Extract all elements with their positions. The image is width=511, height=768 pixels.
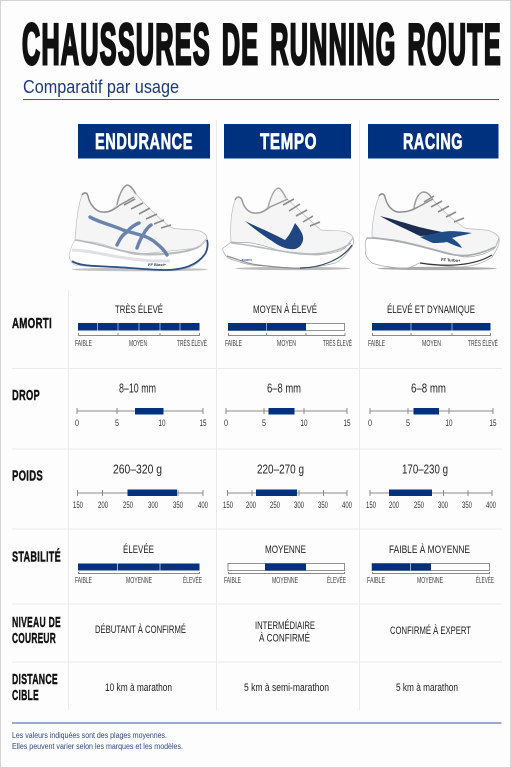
gauge: amorti tempo xyxy=(225,303,352,348)
shoe: endurance xyxy=(69,185,208,271)
header: racing xyxy=(368,124,498,158)
header: tempo xyxy=(224,124,351,158)
row: amorti xyxy=(12,303,498,348)
scale: poids tempo xyxy=(223,462,352,511)
row label: amorti: AMORTI xyxy=(12,316,52,332)
scale: drop racing: 15 xyxy=(490,418,496,429)
scale: poids tempo: 250 xyxy=(270,500,280,511)
header: tempo: TEMPO xyxy=(260,129,317,154)
scale: poids endurance: 250 xyxy=(123,500,133,511)
gauge: amorti endurance xyxy=(75,303,207,348)
scale: drop tempo: 5 xyxy=(262,418,266,429)
scale: drop endurance: 8–10 mm xyxy=(119,382,156,396)
scale: drop tempo: 0 xyxy=(224,418,228,429)
scale: poids racing: 170–230 g xyxy=(402,462,448,476)
gauge: amorti tempo: FAIBLE xyxy=(225,339,242,348)
gauge: amorti racing: ÉLEVÉ ET DYNAMIQUE xyxy=(387,303,475,316)
row label: niveau de coureur: NIVEAU DE xyxy=(12,615,61,631)
header: racing: RACING xyxy=(403,129,463,154)
row label: stabilite: STABILITÉ xyxy=(12,548,61,566)
scale: poids endurance: 150 xyxy=(73,500,83,511)
scale: drop racing: 10 xyxy=(446,418,452,429)
scale: poids tempo: 300 xyxy=(294,500,304,511)
gauge: stabilite racing: FAIBLE À MOYENNE xyxy=(389,543,470,556)
text: niveau tempo: INTERMÉDIAIRE xyxy=(255,619,315,632)
scale: drop racing xyxy=(368,382,496,429)
gauge: stabilite racing: ÉLEVÉE xyxy=(476,576,494,585)
header: endurance: ENDURANCE xyxy=(95,129,193,154)
shoe: racing xyxy=(365,192,499,270)
scale: drop endurance: 5 xyxy=(115,418,119,429)
gauge: stabilite endurance: ÉLEVÉE xyxy=(183,576,202,585)
scale: drop racing: 0 xyxy=(368,418,372,429)
scale: drop endurance: 10 xyxy=(158,418,166,429)
scale: poids tempo: 200 xyxy=(246,500,256,511)
gauge: amorti tempo: MOYEN xyxy=(277,339,296,348)
text: niveau tempo xyxy=(255,619,315,644)
row label: niveau de coureur: COUREUR xyxy=(12,631,56,647)
scale: poids racing: 350 xyxy=(462,500,472,511)
scale: drop racing: 6–8 mm xyxy=(411,382,446,396)
row: niveau de coureur xyxy=(12,615,471,647)
gauge: amorti tempo: MOYEN À ÉLEVÉ xyxy=(253,303,317,316)
scale: poids tempo: 350 xyxy=(318,500,328,511)
scale: drop endurance: 15 xyxy=(200,418,206,429)
text: distance endurance: 10 km à marathon xyxy=(105,682,172,694)
scale: poids endurance: 300 xyxy=(148,500,158,511)
gauge: amorti endurance: TRÈS ÉLEVÉ xyxy=(115,303,163,316)
text: niveau endurance: DÉBUTANT À CONFIRMÉ xyxy=(95,623,186,636)
scale: poids racing: 400 xyxy=(486,500,496,511)
gauge: amorti tempo: TRÈS ÉLEVÉ xyxy=(323,339,352,348)
shoe: racing: FF Turbo+ xyxy=(441,257,461,263)
shoe: tempo xyxy=(223,188,353,270)
scale: poids racing: 150 xyxy=(366,500,376,511)
footnote: Les valeurs indiquées sont des plages moyennes. xyxy=(12,731,167,740)
gauge: stabilite endurance xyxy=(75,543,202,585)
shoe: endurance: FF Blast+ xyxy=(148,262,167,267)
text: niveau racing: CONFIRMÉ À EXPERT xyxy=(390,624,471,637)
scale: drop tempo: 15 xyxy=(344,418,350,429)
row: stabilite xyxy=(12,543,494,585)
subtitle: Comparatif par usage xyxy=(23,77,179,97)
scale: poids tempo: 150 xyxy=(223,500,233,511)
row: distance cible xyxy=(12,672,458,704)
gauge: amorti endurance: FAIBLE xyxy=(75,339,92,348)
row label: niveau de coureur xyxy=(12,615,61,647)
scale: poids tempo: 220–270 g xyxy=(257,462,304,476)
gauge: amorti racing xyxy=(368,303,498,348)
scale: poids racing xyxy=(366,462,496,511)
scale: drop endurance xyxy=(75,382,206,429)
row label: distance cible: DISTANCE xyxy=(12,672,58,688)
gauge: stabilite tempo: MOYENNE xyxy=(272,576,298,585)
scale: drop racing: 5 xyxy=(406,418,410,429)
shoe: tempo: -zoom xyxy=(240,257,252,262)
gauge: stabilite racing xyxy=(367,543,494,585)
text: distance racing: 5 km à marathon xyxy=(396,682,458,694)
scale: poids endurance: 400 xyxy=(198,500,208,511)
footnote: Elles peuvent varier selon les marques et les modèles. xyxy=(12,742,183,751)
scale: poids endurance: 200 xyxy=(98,500,108,511)
row: drop xyxy=(12,382,496,429)
text: distance tempo: 5 km à semi-marathon xyxy=(244,682,329,694)
text: niveau tempo: À CONFIRMÉ xyxy=(259,632,310,644)
scale: poids racing: 250 xyxy=(414,500,424,511)
gauge: stabilite tempo xyxy=(224,544,346,585)
scale: poids endurance xyxy=(73,462,208,511)
gauge: amorti racing: MOYEN xyxy=(422,339,441,348)
row label: drop: DROP xyxy=(12,388,40,404)
footnote xyxy=(12,731,183,751)
row label: distance cible: CIBLE xyxy=(12,688,39,704)
scale: drop tempo xyxy=(224,382,350,429)
gauge: stabilite racing: MOYENNE xyxy=(417,576,443,585)
header: endurance xyxy=(78,124,210,158)
row label: distance cible xyxy=(12,672,58,704)
gauge: stabilite tempo: ÉLEVÉE xyxy=(327,576,346,585)
scale: drop tempo: 6–8 mm xyxy=(267,382,301,396)
gauge: stabilite endurance: ÉLEVÉE xyxy=(123,543,154,556)
scale: poids tempo: 400 xyxy=(342,500,352,511)
scale: drop endurance: 0 xyxy=(75,418,79,429)
gauge: amorti endurance: TRÈS ÉLEVÉ xyxy=(177,339,207,348)
scale: poids endurance: 350 xyxy=(173,500,183,511)
gauge: amorti racing: FAIBLE xyxy=(368,339,385,348)
scale: poids racing: 300 xyxy=(438,500,448,511)
row label: poids: POIDS xyxy=(12,468,43,484)
gauge: stabilite tempo: FAIBLE xyxy=(224,576,241,585)
gauge: stabilite tempo: MOYENNE xyxy=(265,544,306,556)
scale: drop tempo: 10 xyxy=(300,418,308,429)
row: poids xyxy=(12,462,496,511)
gauge: stabilite endurance: MOYENNE xyxy=(126,576,152,585)
scale: poids endurance: 260–320 g xyxy=(113,462,162,476)
gauge: stabilite racing: FAIBLE xyxy=(367,576,385,585)
gauge: stabilite endurance: FAIBLE xyxy=(75,576,92,585)
scale: poids racing: 200 xyxy=(389,500,399,511)
gauge: amorti endurance: MOYEN xyxy=(129,339,147,348)
